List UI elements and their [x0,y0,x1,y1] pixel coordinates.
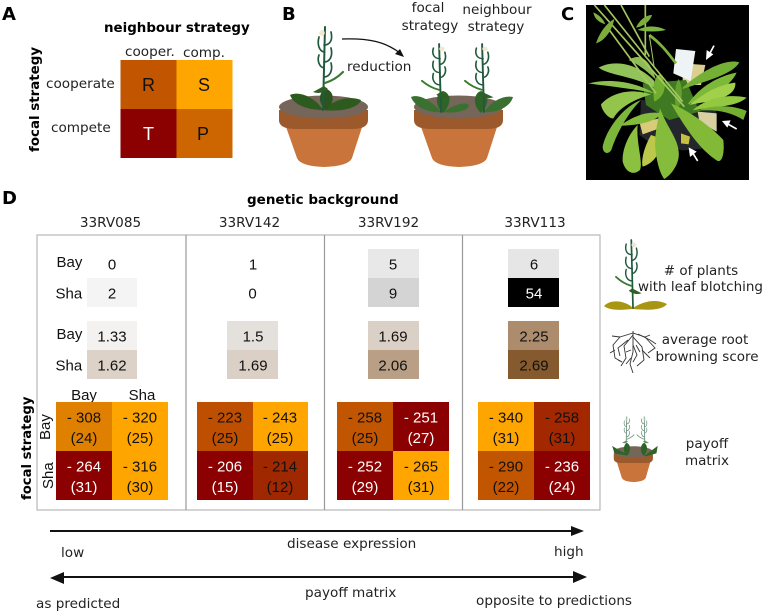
label: reduction: reduction [347,59,411,75]
payoff cells R S T P: P [197,124,209,144]
disease expression labels [61,536,584,561]
payoff matrix 33RV085: (24) [71,430,97,447]
payoff matrix 33RV113: (31) [493,430,519,447]
label: focal strategy: focal [412,0,444,16]
panel A: strategy matrix [2,4,250,158]
disease expression labels: high [554,544,584,560]
payoff axis labels: Sha [40,462,57,489]
reduction arrow [342,39,404,57]
payoff matrix 33RV142 [197,402,308,500]
payoff matrix 33RV142: - 206 [208,458,242,476]
disease expression labels: disease expression [287,536,416,552]
payoff matrix 33RV192: (31) [408,479,434,496]
payoff matrix 33RV113 [478,402,590,500]
payoff matrix 33RV085: - 264 [67,458,101,476]
payoff matrix 33RV142: (15) [212,479,238,496]
payoff matrix 33RV142: (25) [267,430,293,447]
payoff cells R S T P [120,60,232,158]
column labels: cooper. [125,44,175,60]
payoff matrix 33RV113: - 236 [545,458,579,476]
legend text: root browning: average root [662,332,748,348]
values: 2.25 [519,328,549,346]
payoff matrix 33RV085: (30) [127,479,153,496]
plant photograph [586,5,749,180]
heading: neighbour strategy: neighbour strategy [104,21,250,36]
payoff matrix 33RV085: - 320 [123,410,157,426]
payoff cells R S T P: R [142,75,155,95]
legend: root icon [610,331,656,373]
payoff matrix 33RV192: (27) [408,430,434,447]
payoff matrix 33RV113: - 258 [545,410,579,426]
values: 1.5 [243,328,263,346]
payoff axis: focal strategy: focal strategy [20,396,35,500]
disease expression labels: low [61,545,84,561]
values [97,256,549,374]
genotype column labels: 33RV085 [80,215,141,231]
payoff matrix 33RV192: (25) [352,430,378,447]
label B: B [282,4,296,25]
payoff matrix 33RV085: (25) [127,430,153,447]
legend text: payoff matrix: matrix [685,453,729,469]
values: 9 [389,286,397,302]
panel D: results grid [2,188,600,510]
values: 0 [108,256,116,274]
row labels Bay Sha: Sha [56,358,83,374]
payoff matrix 33RV085: - 308 [67,410,101,426]
label D: D [2,188,17,209]
legend: pot icon [613,417,657,482]
payoff axis labels: Bay [71,387,97,404]
legend text: leaf blotching: # of plants [664,263,738,279]
label: neighbour strategy: strategy [468,19,524,35]
payoff matrix 33RV192: (29) [352,479,378,496]
arrow: disease expression [50,526,584,536]
payoff axis labels [37,387,156,489]
row labels Bay Sha [56,254,83,374]
payoff matrix 33RV085 [56,402,168,500]
column labels [125,44,225,61]
legend text: payoff matrix: payoff [686,436,729,452]
payoff axis labels: Sha [129,387,156,404]
legend text: root browning: browning score [655,349,759,365]
row labels: compete [51,120,111,136]
values: 5 [389,256,397,274]
values: 1.69 [238,358,268,374]
payoff cells R S T P: T [143,124,154,144]
values: 1.69 [378,328,408,346]
leaf blotching and root browning cells [87,249,559,379]
payoff matrix 33RV142: - 243 [263,410,297,426]
payoff matrix labels [36,585,632,611]
payoff matrix 33RV192: - 251 [404,410,438,426]
genotype column labels: 33RV142 [219,215,280,231]
arrow: payoff matrix [50,571,587,584]
payoff cells R S T P: S [198,75,210,95]
payoff matrix 33RV142: (12) [267,479,293,496]
grid frame [37,235,600,510]
values: 0 [248,286,257,302]
values: 1.62 [97,358,127,374]
column labels: comp. [183,45,225,61]
label A: A [2,4,16,25]
payoff matrix 33RV113: (31) [549,430,575,447]
single plant pot [279,27,368,167]
panel C: photo of plant [561,4,749,180]
payoff matrix 33RV113: (24) [549,479,575,496]
label: neighbour strategy: neighbour [462,2,532,18]
payoff matrix labels: payoff matrix [305,585,396,601]
axis: focal strategy: focal strategy [28,47,43,152]
genotype column labels: 33RV113 [504,215,566,231]
payoff matrix 33RV142: - 214 [263,458,297,476]
payoff matrix 33RV192 [337,402,449,500]
row labels [46,76,115,136]
genotype column labels: 33RV192 [358,215,419,231]
legend: plant with blotching [604,240,667,310]
values: 1.33 [97,328,127,346]
payoff matrix 33RV113: (22) [493,479,519,496]
row labels: cooperate [46,76,115,92]
values: 54 [526,286,542,302]
payoff matrix 33RV192: - 265 [404,458,438,476]
payoff matrix 33RV085: (31) [71,479,97,496]
heading: genetic background: genetic background [247,192,399,208]
values: 2.06 [378,358,408,374]
two plant pot [411,44,513,167]
payoff matrix labels: opposite to predictions [476,593,632,609]
panel B: pot illustrations [279,0,532,167]
row labels Bay Sha: Bay [56,254,83,271]
values: 2 [108,286,116,302]
payoff matrix 33RV192: - 252 [348,458,382,476]
legend text: leaf blotching: with leaf blotching [638,279,763,295]
payoff matrix 33RV142: (25) [212,430,238,447]
label: focal strategy: strategy [402,18,458,34]
payoff matrix 33RV192: - 258 [348,410,382,426]
payoff matrix 33RV113: - 340 [489,410,523,426]
payoff matrix 33RV142: - 223 [208,410,242,426]
genotype column labels [80,215,566,231]
values: 6 [530,256,538,274]
payoff matrix 33RV085: - 316 [123,458,157,476]
values: 2.69 [519,358,549,374]
row labels Bay Sha: Sha [56,286,83,302]
label C: C [561,4,574,25]
payoff axis labels: Bay [37,414,54,440]
payoff matrix 33RV113: - 290 [489,458,523,476]
values: 1 [249,256,257,274]
row labels Bay Sha: Bay [56,326,83,343]
